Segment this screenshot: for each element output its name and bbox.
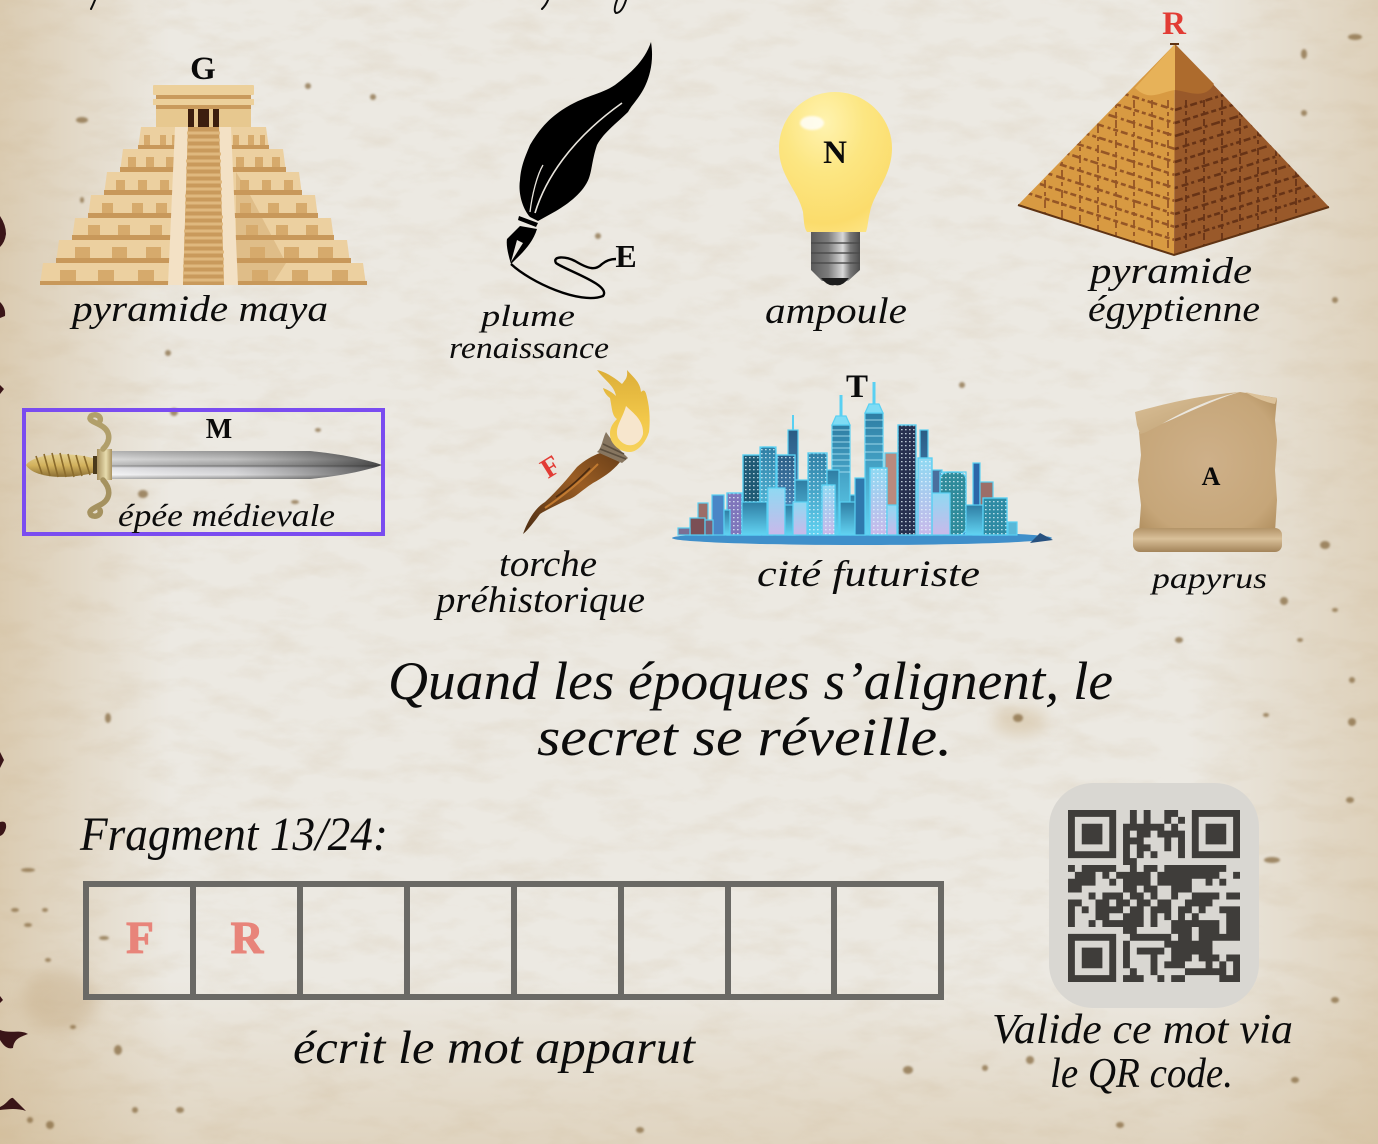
label: pyramide maya: pyramide maya [69,289,328,330]
item: medieval sword (selected) [24,410,383,534]
label: papyrus: papyrus [1150,562,1267,595]
letter R (red): R [1162,6,1187,42]
label: torche préhistorique: torche [499,544,597,585]
letter G: G [190,51,216,87]
item: light bulb [765,92,907,332]
label: pyramide égyptienne: pyramide [1087,251,1252,292]
icon: papyrus scroll [1133,392,1282,552]
cut-off text tails at the top edge [91,0,626,13]
letter A: A [1202,462,1221,491]
letter T: T [846,369,868,405]
item: Maya pyramid [40,51,367,330]
answer boxes [86,884,941,997]
label: pyramide égyptienne: égyptienne [1088,289,1260,330]
item: Renaissance quill [449,42,652,365]
letter F (red, tilted): F [535,450,566,485]
heading: tagline: Quand les époques s’alignent, le [388,651,1113,711]
QR code caption [992,1007,1293,1097]
letter F in box: F [126,913,154,963]
letter R in box: R [231,913,264,963]
item: futuristic city [672,369,1053,595]
QR code panel [1049,783,1259,1008]
icon: torch [523,370,650,534]
letter N: N [823,135,847,171]
label: torche préhistorique [433,544,645,621]
instruction text: écrit le mot apparut [293,1022,696,1074]
item: Egyptian pyramid [1018,6,1329,330]
label: torche préhistorique: préhistorique [433,580,645,621]
item: papyrus [1133,392,1282,595]
letter M: M [206,414,232,445]
label: cité futuriste: cité futuriste [757,554,980,595]
heading: tagline: secret se réveille. [537,707,952,767]
icon: Egyptian pyramid [1018,44,1329,255]
icon: futuristic city [672,382,1053,545]
icon: sword [26,415,382,516]
item: prehistoric torch [433,370,650,621]
heading: tagline [388,651,1113,767]
QR code caption: le QR code. [1050,1051,1233,1097]
icon: quill [507,42,652,298]
icon: Maya pyramid [40,85,367,285]
selection frame [24,410,383,534]
label: pyramide égyptienne [1087,251,1260,330]
heading: fragment number: Fragment 13/24: [79,808,388,861]
label: plume renaissance: renaissance [449,330,609,365]
QR code [1068,810,1240,982]
label: plume renaissance: plume [479,298,575,333]
QR code caption: Valide ce mot via [992,1007,1293,1053]
label: ampoule: ampoule [765,291,907,332]
icon: light bulb [779,92,892,285]
letter E: E [615,238,637,274]
label: plume renaissance [449,298,609,365]
label: épée médievale: épée médievale [118,497,335,533]
